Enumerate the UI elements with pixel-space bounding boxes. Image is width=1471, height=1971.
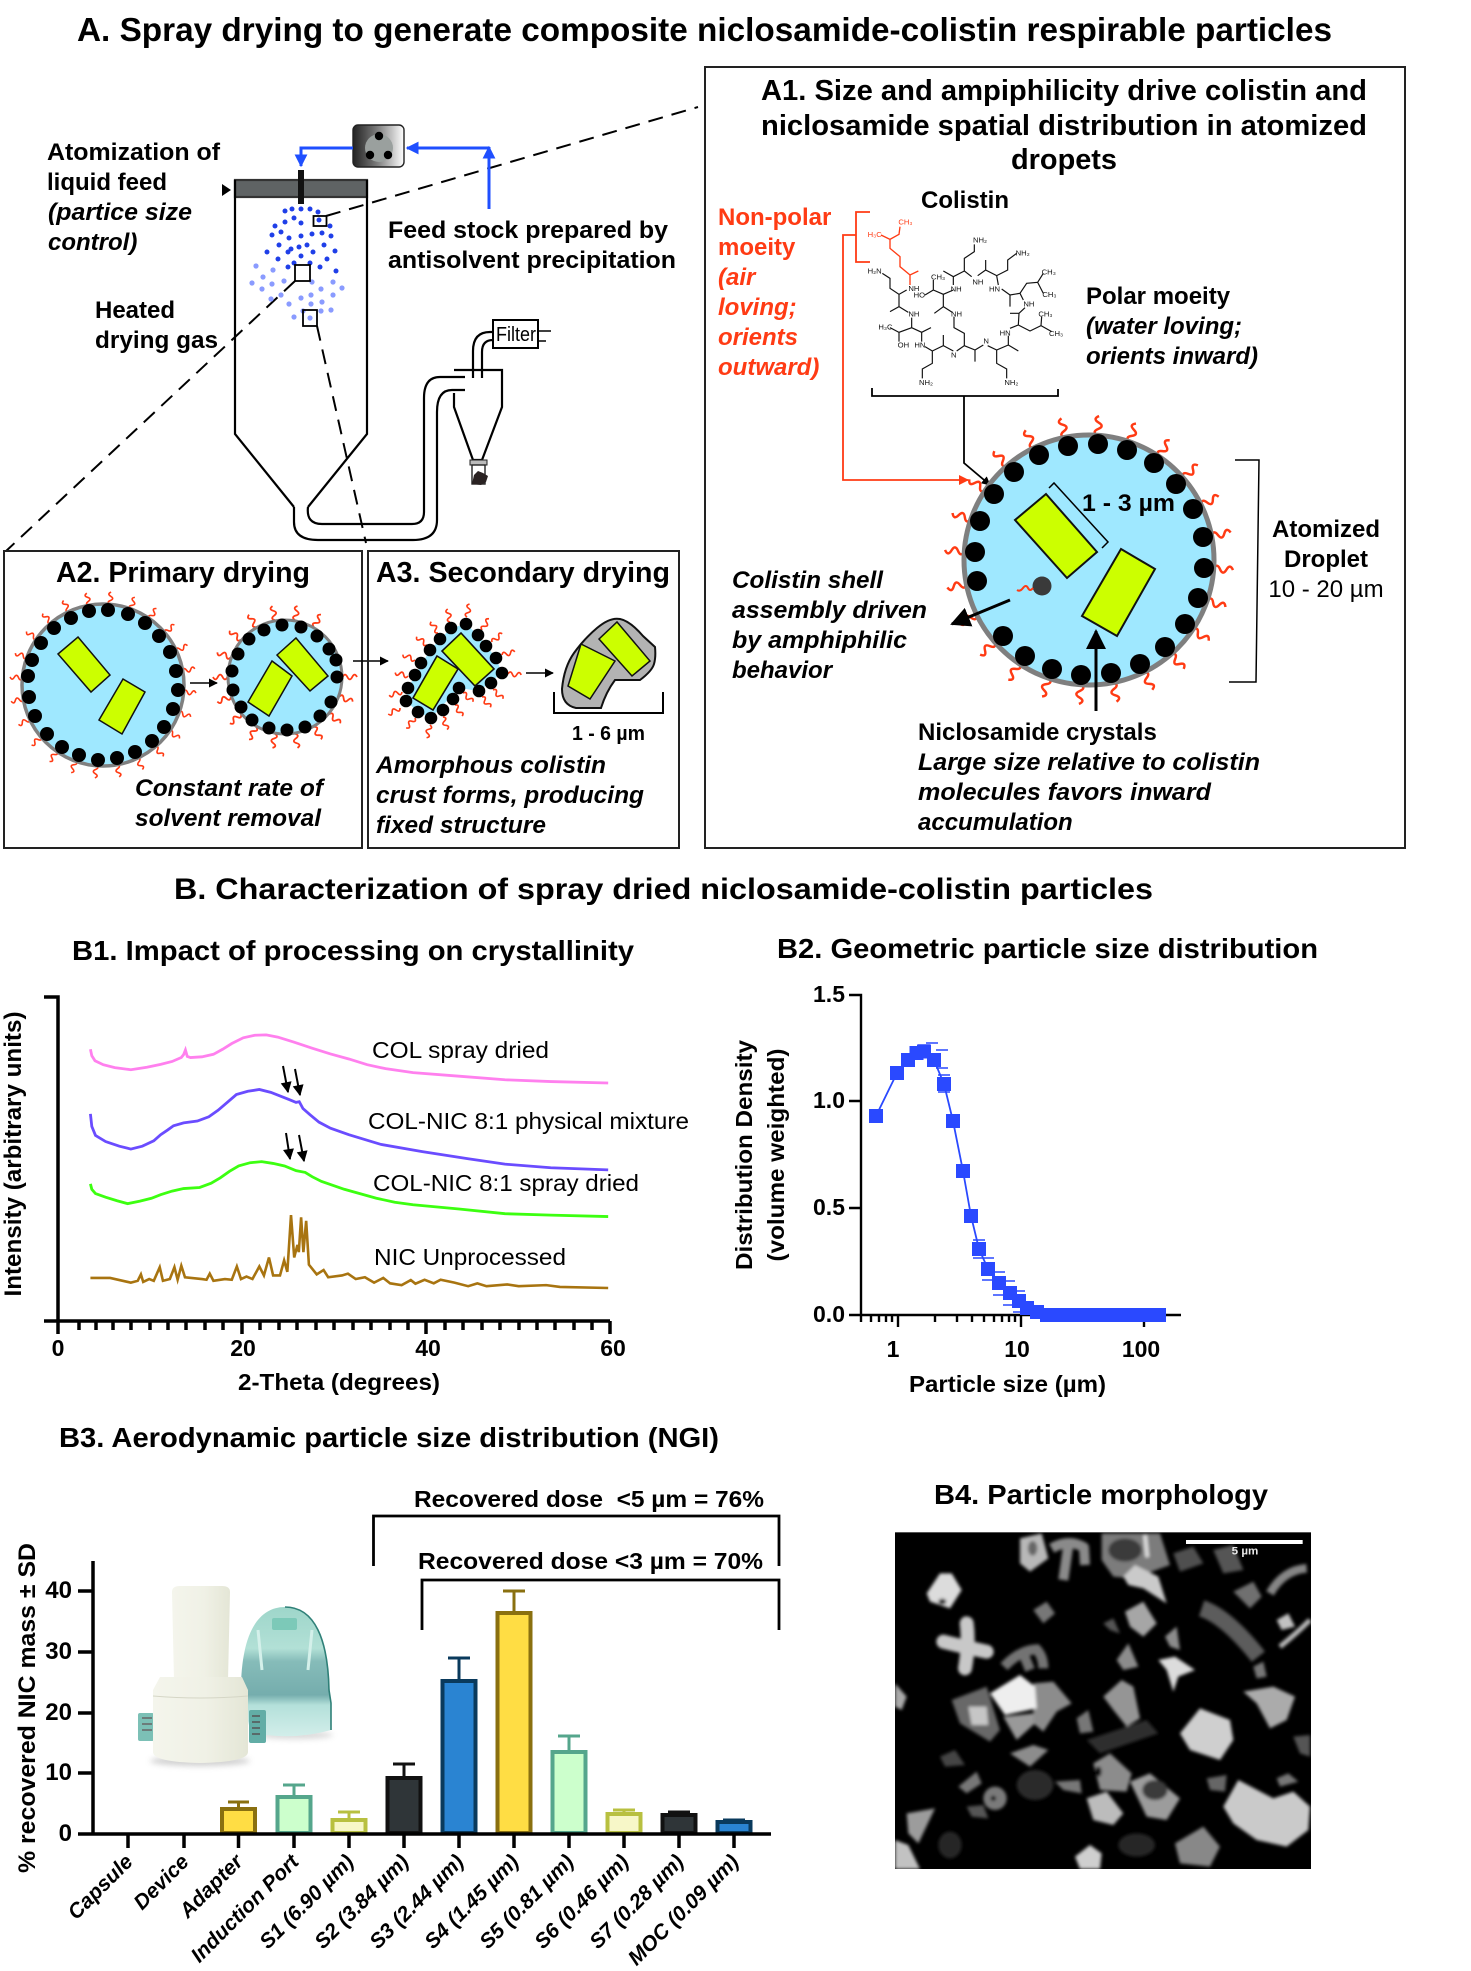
label: atomization: liquid feed — [47, 169, 167, 196]
x tick labels: 1 — [887, 1336, 900, 1362]
y axis label: % recovered NIC mass ± SD — [14, 1543, 41, 1873]
crystal length bracket — [1049, 483, 1108, 548]
panel: B1 XRD chart — [0, 935, 689, 1395]
collection vial — [470, 460, 488, 485]
caption: niclosamide crystals: Large size relative to colistin — [918, 749, 1260, 776]
panel: B3 aerodynamic distribution — [14, 1422, 779, 1970]
chemical structure: colistin: NH — [972, 277, 983, 286]
diagram: spray dryer — [5, 107, 698, 552]
label: polar moiety: Polar moeity — [1086, 283, 1231, 310]
label: non-polar moiety: orients — [718, 324, 798, 351]
label: atomized droplet: Droplet — [1284, 546, 1368, 573]
chemical structure: colistin: OH — [898, 341, 909, 350]
blue feed lines — [301, 147, 489, 209]
chemical structure: colistin: HN — [914, 341, 925, 350]
chemical structure: colistin: NH — [951, 310, 962, 319]
caption: colistin shell: Colistin shell — [732, 567, 884, 594]
label: feed stock: antisolvent precipitation — [388, 247, 676, 274]
x stage labels: S6 (0.46 µm) — [530, 1850, 634, 1954]
dried particle — [562, 619, 655, 708]
dried spray dots — [249, 263, 345, 321]
label: non-polar moiety: loving; — [718, 294, 797, 321]
caption: A2 — [135, 775, 325, 832]
label: atomization: Atomization of — [47, 139, 221, 166]
y tick labels — [45, 1577, 72, 1847]
chemical structure: colistin: N — [983, 336, 989, 345]
scale bar — [1186, 1540, 1303, 1544]
caption: colistin shell: behavior — [732, 657, 834, 684]
heading: A1 — [761, 75, 1367, 176]
heading: A2: A2. Primary drying — [56, 557, 310, 589]
caption: niclosamide crystals: Niclosamide crystals — [918, 719, 1157, 746]
panel: A1 droplet distribution — [705, 67, 1405, 848]
arrow: droplet shrink — [190, 682, 217, 684]
x stage labels: S7 (0.28 µm) — [585, 1850, 689, 1954]
zoom boxes — [295, 216, 326, 326]
label: atomized droplet — [1268, 516, 1384, 603]
chemical structure: colistin: NH — [1023, 300, 1034, 309]
droplet: late primary drying — [196, 583, 357, 759]
label: polar moiety: (water loving; — [1086, 313, 1242, 340]
heading: B2: B2. Geometric particle size distribution — [777, 933, 1318, 964]
x stage labels: Adapter — [174, 1849, 249, 1923]
label: non-polar moiety: (air — [718, 264, 757, 291]
chemical structure: colistin: NH₂ — [919, 378, 933, 387]
droplet: atomized — [935, 406, 1243, 714]
transfer tube — [294, 377, 465, 540]
bracket: droplet size — [1229, 460, 1259, 682]
atomized spray dots — [264, 206, 338, 274]
axes — [849, 995, 1181, 1327]
heading: B1: B1. Impact of processing on crystallinity — [72, 935, 634, 966]
chemical structure: colistin: NH₂ — [973, 236, 987, 245]
heading: A1: A1. Size and ampiphilicity drive colistin and — [761, 75, 1367, 107]
bracket: polar moiety — [872, 388, 1058, 485]
x stage labels: S4 (1.45 µm) — [420, 1850, 524, 1954]
x stage labels: S2 (3.84 µm) — [310, 1850, 414, 1954]
drying chamber — [235, 180, 367, 507]
chemical structure: colistin: H₃C — [878, 322, 893, 331]
chemical structure: colistin: NH₂ — [1004, 378, 1018, 387]
inhaler device photo — [138, 1586, 333, 1766]
axes — [44, 997, 610, 1334]
label: atomized droplet: Atomized — [1272, 516, 1380, 543]
chemical structure: colistin: CH₃ — [1042, 267, 1056, 276]
x axis label: Particle size (µm) — [909, 1371, 1106, 1397]
chemical structure: colistin: NH — [951, 285, 962, 294]
curves — [90, 1035, 608, 1288]
label: crystal size: 1 - 3 µm — [1082, 490, 1175, 517]
chemical structure: colistin: CH₃ — [1049, 329, 1063, 338]
y axis label — [731, 1040, 789, 1270]
panel: B4 particle morphology — [895, 1479, 1311, 1869]
bracket: under 5 um — [374, 1486, 779, 1566]
y tick labels: 20 — [45, 1699, 72, 1726]
colistin tails — [387, 604, 521, 738]
x stage labels: Induction Port — [187, 1850, 304, 1967]
heading: B4: B4. Particle morphology — [934, 1479, 1268, 1510]
chemical structure: colistin: NH₂ — [1016, 249, 1030, 258]
chemical structure: colistin: CH₃ — [1042, 290, 1057, 299]
caption: A3: fixed structure — [376, 812, 546, 839]
label: non-polar moiety: moeity — [718, 234, 796, 261]
label: colistin: Colistin — [921, 187, 1009, 214]
title: section B: B. Characterization of spray dried niclosamide-colistin particles — [174, 873, 1153, 906]
droplet: crust forming — [387, 604, 521, 738]
panel: B2 particle size distribution — [731, 933, 1318, 1397]
label: feed stock — [388, 217, 676, 274]
label: atomization: (partice size — [48, 199, 192, 226]
bracket: under 3 um — [418, 1548, 779, 1630]
arrow: crystals — [1094, 631, 1098, 711]
chemical structure: colistin: H₃C — [868, 230, 882, 239]
bracket: under 3 um: Recovered dose <3 µm = 70% — [418, 1548, 763, 1574]
chemical structure: colistin — [868, 217, 1063, 387]
chemical structure: colistin: CH₃ — [898, 217, 913, 226]
x stage labels: Device — [129, 1850, 194, 1914]
chemical structure: colistin: CH₃ — [1038, 310, 1053, 319]
curve labels: COL-NIC 8:1 physical mixture — [368, 1108, 689, 1134]
arrow: primary to secondary — [353, 660, 388, 662]
x stage labels: S5 (0.81 µm) — [475, 1850, 579, 1954]
caption: niclosamide crystals — [918, 719, 1260, 836]
red bracket and arrow — [843, 212, 968, 480]
label: particle size: 1 - 6 µm — [572, 723, 645, 745]
x tick labels — [887, 1336, 1160, 1362]
x stage labels: S3 (2.44 µm) — [365, 1850, 469, 1954]
label: heated gas: drying gas — [95, 327, 218, 354]
heading: A3: A3. Secondary drying — [376, 557, 670, 589]
heading: A1: niclosamide spatial distribution in atomized — [761, 110, 1367, 142]
label: heated gas: Heated — [95, 297, 175, 324]
caption: colistin shell: by amphiphilic — [732, 627, 907, 654]
chemical structure: colistin: NH — [908, 310, 919, 319]
y tick labels: 0.5 — [813, 1194, 845, 1220]
x stage labels: S1 (6.90 µm) — [255, 1850, 359, 1954]
x tick labels: 60 — [600, 1335, 626, 1361]
label: non-polar moiety: Non-polar — [718, 204, 831, 231]
axes — [78, 1561, 771, 1848]
label: non-polar moiety: outward) — [718, 354, 819, 381]
chemical structure: colistin: HO — [914, 291, 925, 300]
caption: A2: Constant rate of — [135, 775, 325, 802]
x tick labels: 10 — [1004, 1336, 1030, 1362]
arrow: crust to particle — [526, 672, 553, 674]
label: feed stock: Feed stock prepared by — [388, 217, 669, 244]
x stage labels: Capsule — [63, 1850, 138, 1924]
label: non-polar moiety — [718, 204, 831, 381]
y tick labels: 30 — [45, 1638, 72, 1665]
x tick labels: 40 — [415, 1335, 441, 1361]
y tick labels: 10 — [45, 1759, 72, 1786]
data series — [869, 1043, 1166, 1322]
curve labels: COL-NIC 8:1 spray dried — [373, 1170, 639, 1196]
droplet: early primary drying — [2, 584, 204, 786]
x stage labels — [63, 1849, 744, 1970]
free colistin molecule — [1017, 576, 1052, 596]
caption: A3 — [375, 752, 644, 839]
scale label: 5 µm — [1232, 1546, 1258, 1558]
title: section A: A. Spray drying to generate composite niclosamide-colistin respirable particles — [77, 11, 1332, 48]
caption: colistin shell — [732, 567, 927, 684]
y tick labels: 1.0 — [813, 1087, 845, 1113]
label: atomized droplet: 10 - 20 µm — [1268, 576, 1384, 603]
x tick labels: 0 — [52, 1335, 64, 1361]
caption: A3: crust forms, producing — [376, 782, 644, 809]
label: polar moiety — [1086, 283, 1258, 370]
cyclone — [454, 331, 551, 460]
y axis label: Intensity (arbitrary units) — [0, 1012, 27, 1296]
dashed zoom lines — [5, 107, 698, 552]
curve labels — [368, 1037, 689, 1270]
y axis label: (volume weighted) — [763, 1048, 789, 1262]
y tick labels: 1.5 — [813, 981, 845, 1007]
chemical structure: colistin: H₂N — [868, 267, 882, 276]
crystals — [1015, 494, 1155, 636]
heading: B3: B3. Aerodynamic particle size distribution (NGI) — [59, 1422, 719, 1453]
x axis label: 2-Theta (degrees) — [238, 1369, 440, 1395]
bars — [222, 1591, 750, 1833]
y tick labels: 40 — [45, 1577, 72, 1604]
chemical structure: colistin: CH₃ — [931, 273, 945, 282]
panel: A3 secondary drying — [368, 551, 679, 848]
x stage labels: MOC (0.09 µm) — [624, 1850, 744, 1970]
feed pump — [353, 125, 404, 167]
nozzle — [298, 170, 304, 204]
pointer triangle — [222, 184, 231, 196]
y axis label: Distribution Density — [731, 1040, 757, 1270]
SEM micrograph — [895, 1532, 1311, 1869]
bracket: under 5 um: Recovered dose <5 µm = 76% — [414, 1486, 764, 1512]
panel: A2 primary drying — [2, 551, 362, 848]
chemical structure: colistin: HN — [989, 285, 1000, 294]
label: atomization — [47, 139, 221, 256]
filter box: Filter — [496, 324, 536, 346]
caption: niclosamide crystals: accumulation — [918, 809, 1073, 836]
x tick labels: 20 — [230, 1335, 256, 1361]
label: heated gas — [95, 297, 218, 354]
x tick labels: 100 — [1122, 1336, 1160, 1362]
label: atomization: control) — [48, 229, 137, 256]
arrow: shell assembly — [952, 600, 1010, 624]
caption: niclosamide crystals: molecules favors inward — [918, 779, 1212, 806]
y tick labels: 0.0 — [813, 1301, 845, 1327]
y tick labels: 0 — [59, 1820, 72, 1847]
caption: A2: solvent removal — [135, 805, 322, 832]
peak arrows — [283, 1066, 304, 1161]
label: polar moiety: orients inward) — [1086, 343, 1258, 370]
curve labels: NIC Unprocessed — [374, 1244, 566, 1270]
chemical structure: colistin: N — [951, 351, 957, 360]
y tick labels — [813, 981, 845, 1327]
caption: A3: Amorphous colistin — [375, 752, 606, 779]
chemical structure: colistin: HN — [1000, 328, 1011, 337]
chemical structure: colistin: NH — [908, 284, 919, 293]
x tick labels — [52, 1335, 626, 1361]
curve labels: COL spray dried — [372, 1037, 549, 1063]
size bracket — [554, 692, 663, 713]
caption: colistin shell: assembly driven — [732, 597, 927, 624]
heading: A1: dropets — [1011, 144, 1117, 176]
